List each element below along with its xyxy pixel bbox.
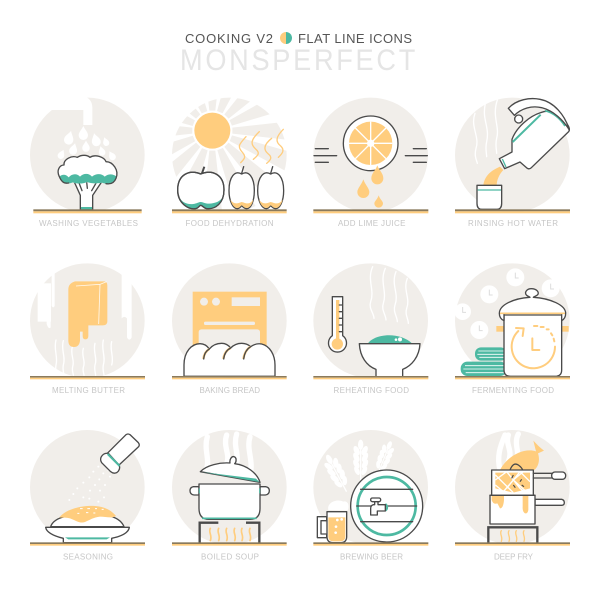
heading: Monsperfect: MONSPERFECT [180,44,418,77]
ground line [33,209,142,213]
panel: rinsing hot water [455,98,570,228]
icon: steam lines [55,340,112,375]
ground line [30,542,145,546]
icon: kettle [499,99,569,169]
icon: food mound [368,335,412,344]
panel: baking bread [172,263,287,395]
label: RINSING HOT WATER [468,219,558,228]
title: Cooking V2 Flat Line Icons [185,31,412,46]
panel: food dehydration [172,98,287,226]
ground line [30,376,145,379]
label: BREWING BEER [340,552,403,562]
panel: fermenting food [454,263,570,395]
icon: bowl [359,344,420,377]
icon: juice drops [357,165,383,208]
icon: flames [210,528,251,541]
icon: pot handles [496,326,569,332]
ground line [313,209,428,213]
icon: pot [190,484,269,519]
panel: add lime juice [313,98,428,228]
icon: steam [370,267,408,323]
icon: fish [500,441,544,471]
icon: barrel [351,470,423,542]
icon: lime slice [343,116,398,171]
label: FERMENTING FOOD [472,386,554,395]
icon: poured water [483,167,503,186]
label: BOILED SOUP [201,552,259,562]
panel: deep fry [455,430,570,562]
panel: melting butter [30,263,145,395]
panel: washing vegetables [30,95,145,228]
icon: salt grains [68,461,111,503]
icon: dried apple right [258,167,284,209]
panel: brewing beer [313,430,428,562]
icon: steam [474,100,497,163]
ground line [313,376,428,379]
icon: thermometer [328,297,346,352]
icon: flames [501,531,525,541]
motion lines left [314,149,337,162]
ground line [172,209,287,213]
ground line [455,542,570,546]
label: FOOD DEHYDRATION [186,219,274,228]
icon: plate [46,527,129,543]
icon: bread loaf [184,343,275,376]
icon: steam [206,434,251,475]
melting drips cutouts [38,270,132,340]
label: DEEP FRY [494,552,534,562]
icon: pot [499,289,566,376]
icon: heat waves [239,129,283,163]
icon: tap [371,498,387,515]
icon: burner stand [200,523,259,543]
icon: butter block [68,281,107,347]
icon: oven [193,292,267,349]
ground line [455,209,570,213]
icon: beer mug [317,501,349,543]
icon: salt shaker [101,434,139,473]
icon: fryer pot [490,495,564,524]
icon: frying basket [492,464,566,495]
icon: steam [499,434,518,470]
label: BAKING BREAD [200,386,260,395]
icon: burner stand [488,527,537,543]
icon: stacked plates [461,347,507,376]
sun rays [172,98,286,210]
icon: wheat [319,439,398,496]
icon: cup [477,185,502,209]
icon: dried apple left [229,167,254,209]
icon: two-colour dot [280,32,292,44]
icon: broccoli [58,155,117,209]
icon: small clocks [454,268,560,339]
label: WASHING VEGETABLES [39,219,138,228]
icon: food on plate [51,506,124,527]
label: SEASONING [63,552,113,562]
icon: sun [194,113,230,149]
panel: seasoning [30,430,145,562]
icon: faucet water [43,95,92,125]
icon: clock timer [512,326,555,368]
icon: large apple [178,167,224,209]
icon: water drops [57,126,117,161]
ground line [455,376,570,379]
icon: tilted lid [200,457,260,482]
ground line [313,542,428,546]
ground line [172,376,287,379]
motion lines right [405,149,427,162]
label: MELTING BUTTER [52,386,125,395]
title: Cooking V2 Flat Line Icons: COOKING V2 [185,31,273,46]
panel: boiled soup [172,430,287,562]
label: REHEATING FOOD [334,386,409,395]
label: ADD LIME JUICE [338,219,406,228]
panel: reheating food [313,263,428,395]
title: Cooking V2 Flat Line Icons: FLAT LINE ICONS [298,31,412,46]
ground line [172,542,287,546]
